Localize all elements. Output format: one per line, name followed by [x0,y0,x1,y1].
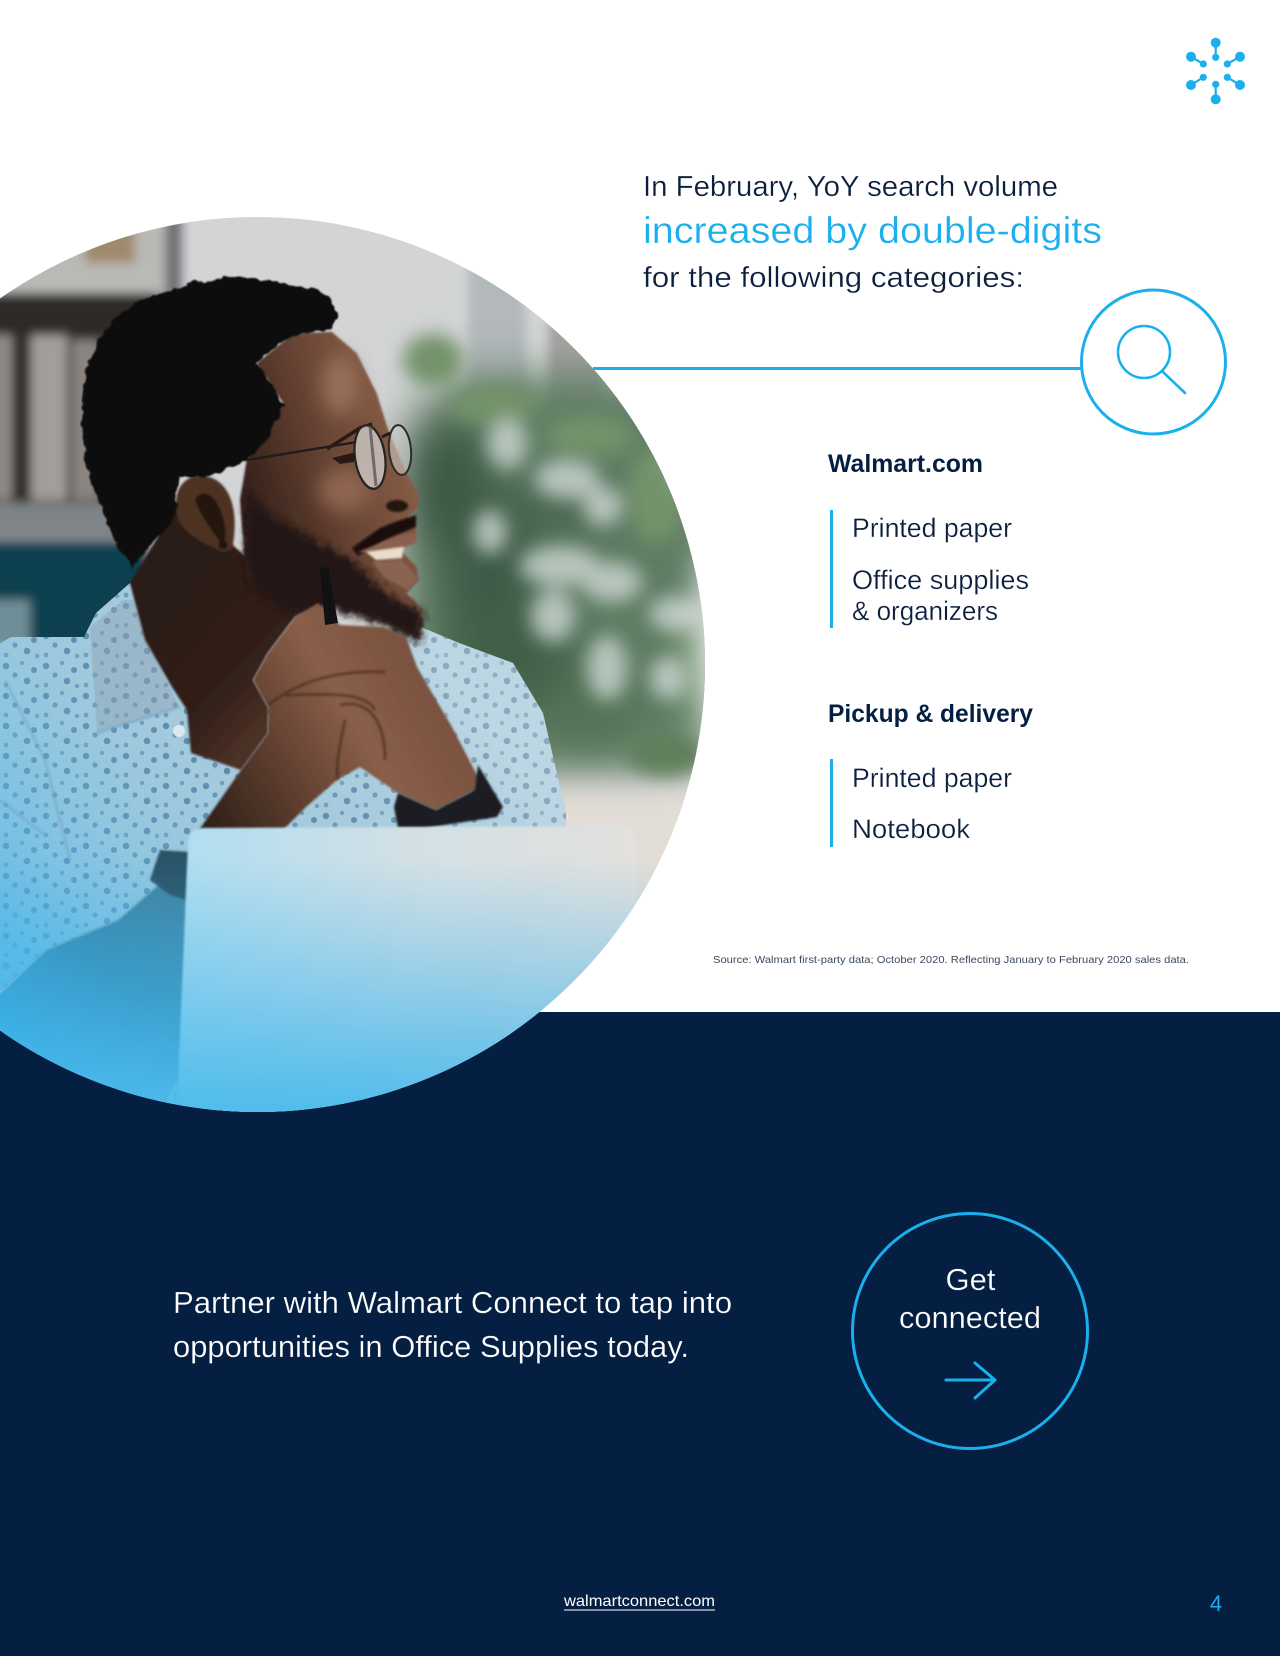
button: Get connected circle with arrow: connected [899,1300,1041,1335]
heading: search volume statement: In February, YoY search volume [643,171,1058,203]
photo: shirt [0,583,566,1010]
footer: website link: walmartconnect.com [563,1593,715,1610]
list: Pickup & delivery categories [828,700,1033,847]
photo: small sleeve patch [166,1082,178,1105]
photo: collar [90,600,193,733]
photo: beard stubble [245,490,423,645]
button: Get connected circle with arrow: Get [946,1262,996,1297]
source note: Source: Walmart first-party data; October 2020. Reflecting January to February 2020 sales data. [713,954,1189,966]
heading: search volume statement: for the following categories: [643,262,1024,294]
panel: navy lower band [0,1012,1280,1656]
photo: ear [176,476,235,552]
photo: lips and teeth [358,533,418,590]
list: Walmart.com categories: Walmart.com [828,450,983,478]
photo: pen [320,567,338,625]
photo: glasses [247,423,413,491]
heading: search volume statement [643,171,1102,294]
list: Pickup & delivery categories: Printed paper [852,763,1012,793]
list: Pickup & delivery categories: Pickup & delivery [828,700,1033,728]
background: white upper page [0,0,1280,1012]
photo: lower blue fade [0,874,652,1112]
photo: man with laptop in circular crop [0,217,705,1112]
photo: nose shadow [386,500,408,512]
photo: face [240,332,423,640]
photo: forearm foreground [0,883,188,1106]
photo: face highlights [319,355,371,512]
list: Pickup & delivery categories: Notebook [852,814,970,844]
photo background: blurred plant [397,375,720,775]
heading: search volume statement: increased by double-digits [643,210,1102,251]
photo: neck [128,506,309,771]
photo: finger creases [268,672,385,780]
footer: page number: 4 [1210,1591,1222,1616]
call to action text: Partner with Walmart Connect to tap into [173,1285,732,1320]
call to action text [173,1285,732,1364]
list: Walmart.com categories [828,450,1029,628]
photo: bracelet [150,850,190,900]
photo: watch band [394,765,503,828]
photo: mustache [352,515,416,556]
call to action text: opportunities in Office Supplies today. [173,1329,689,1364]
icon: Walmart Connect network logo [1186,38,1245,104]
photo background: plant bokeh highlights [473,417,701,700]
list: Walmart.com categories: & organizers [852,596,998,626]
icon: magnifying glass in circle [1082,290,1226,434]
photo background: wall and shelves [0,217,705,1112]
photo: shirt folds [0,680,180,860]
photo: hair [81,277,336,568]
photo background: floor and right white fade [557,549,705,902]
list: Walmart.com categories: Printed paper [852,513,1012,543]
photo: laptop [176,826,636,1130]
photo: hands [199,603,478,830]
connector line to search icon [593,367,1081,370]
button: Get connected circle with arrow [852,1214,1088,1448]
list: Walmart.com categories: Office supplies [852,565,1029,595]
photo background: plant greens [403,334,707,781]
